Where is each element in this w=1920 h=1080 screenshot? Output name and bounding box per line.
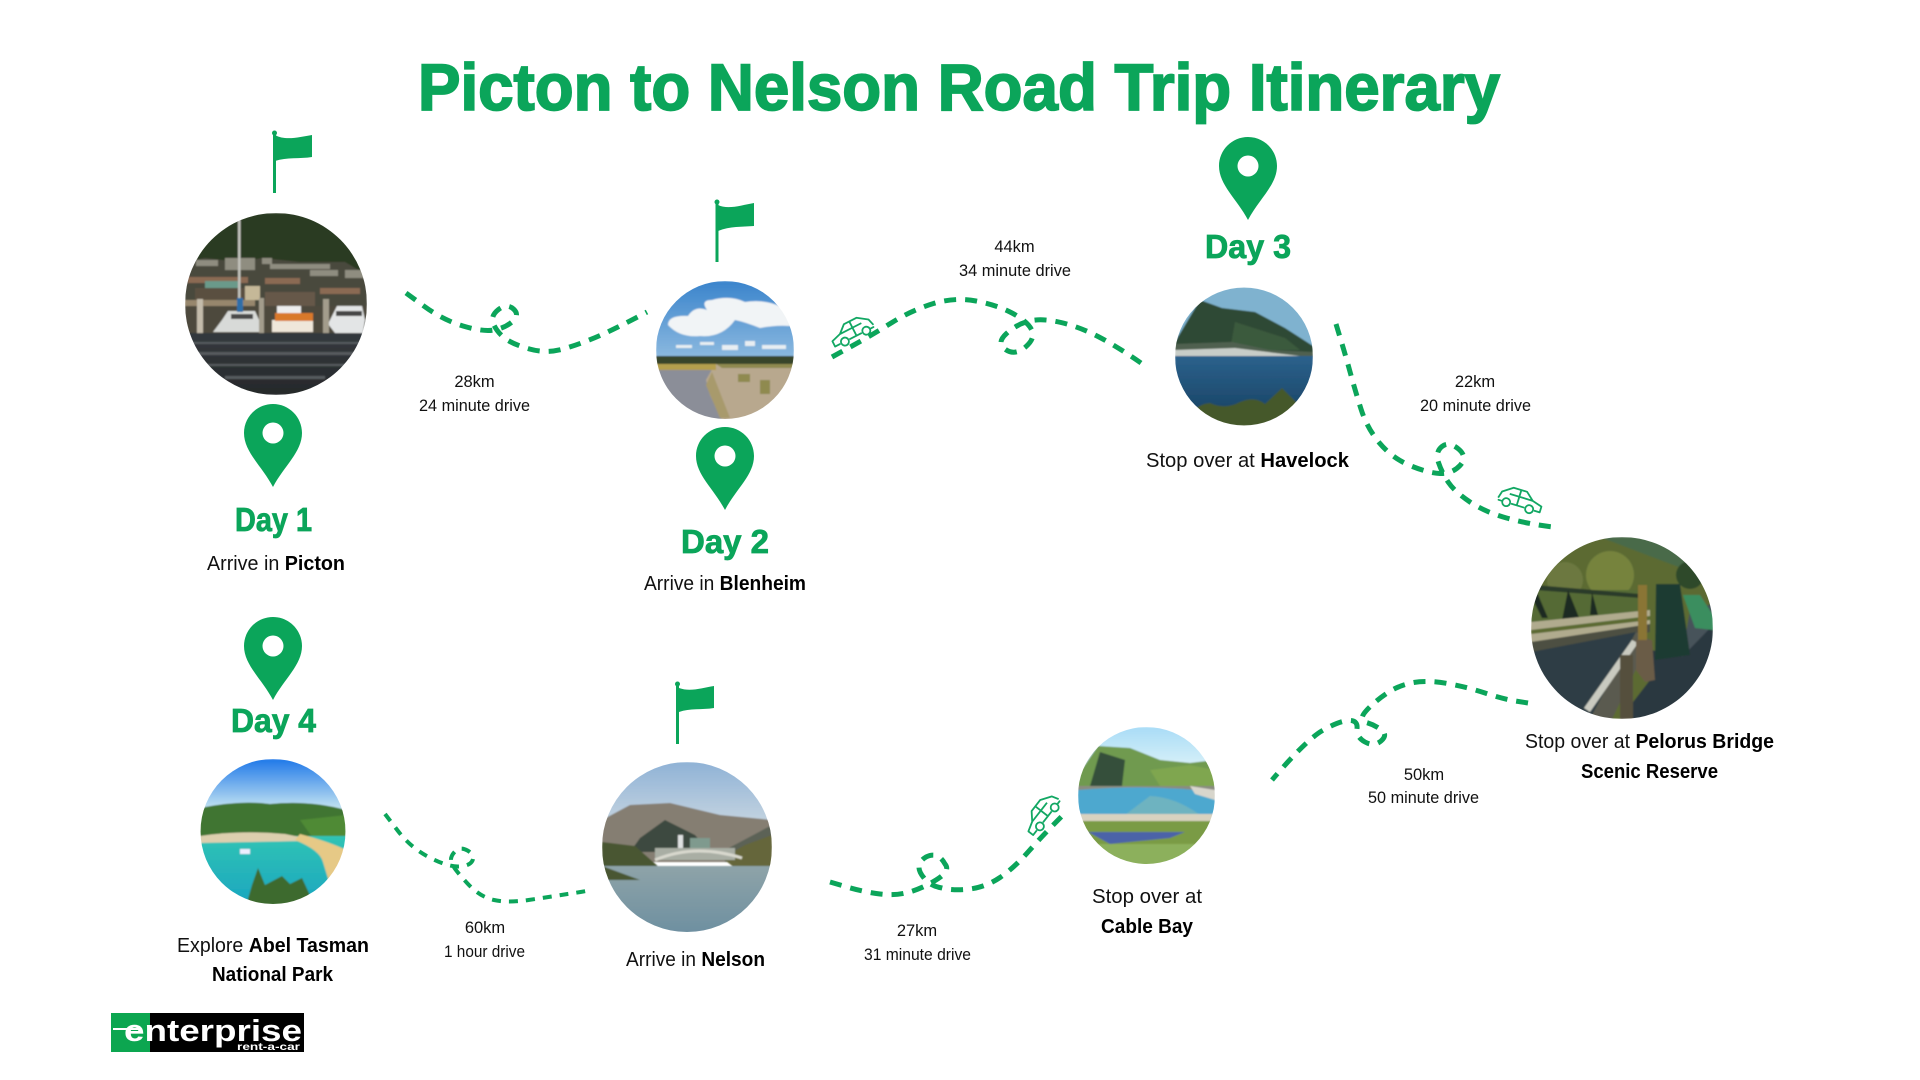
icon: flag Picton <box>272 130 312 193</box>
icon: pin Day 3 <box>1219 137 1277 220</box>
text: 28km: 28km <box>454 373 495 391</box>
text: 34 minute drive: 34 minute drive <box>959 262 1071 280</box>
icon: pin Day 2 <box>696 427 754 510</box>
text: 1 hour drive: 1 hour drive <box>444 943 525 961</box>
label: Arrive in Nelson: Arrive in Nelson <box>626 948 765 971</box>
panel: Cable Bay <box>1078 727 1215 938</box>
heading: Day 1: Day 1 <box>235 501 312 538</box>
route: Picton to Blenheim <box>406 293 647 415</box>
photo: Picton marina <box>185 213 367 395</box>
text: 60km: 60km <box>465 919 505 937</box>
text: 27km: 27km <box>897 922 937 940</box>
text: 50 minute drive: 50 minute drive <box>1368 789 1479 807</box>
photo: Pelorus Bridge <box>1530 537 1713 719</box>
label: Stop over at Havelock: Stop over at Havelock <box>1146 449 1350 472</box>
text: 24 minute drive: 24 minute drive <box>419 397 530 415</box>
text: 31 minute drive: 31 minute drive <box>864 946 971 964</box>
logo: enterprise rent-a-car: rent-a-car <box>237 1041 300 1053</box>
label: Stop over at Pelorus Bridge: Stop over at Pelorus Bridge <box>1525 730 1774 753</box>
photo: Blenheim river <box>656 281 794 420</box>
icon: flag Nelson <box>675 682 714 744</box>
heading: Day 4: Day 4 <box>231 702 317 739</box>
photo: Havelock bay <box>1175 287 1313 426</box>
label: Stop over at: Stop over at <box>1092 885 1202 908</box>
icon: car Blenheim route <box>828 312 876 350</box>
icon: car Cable Bay route <box>1021 791 1063 838</box>
photo: Nelson river <box>602 762 772 934</box>
photo: Abel Tasman beach <box>200 759 346 906</box>
panel: Pelorus Bridge <box>1525 537 1774 783</box>
icon: pin Day 4 <box>244 617 302 700</box>
text: 22km: 22km <box>1455 373 1495 391</box>
route: Havelock to Pelorus Bridge <box>1336 324 1553 527</box>
panel: Day 1 Picton <box>185 130 367 575</box>
icon: car Havelock route <box>1496 484 1544 516</box>
label: Cable Bay: Cable Bay <box>1101 915 1194 938</box>
icon: pin Day 1 <box>244 404 302 487</box>
route: Pelorus Bridge to Cable Bay <box>1272 681 1528 807</box>
title: Picton to Nelson Road Trip Itinerary <box>418 50 1500 124</box>
heading: Day 2: Day 2 <box>681 523 769 560</box>
heading: Day 3: Day 3 <box>1205 228 1291 265</box>
route: Blenheim to Havelock <box>828 238 1141 363</box>
text: 44km: 44km <box>994 238 1035 256</box>
route: Nelson to Abel Tasman <box>385 814 586 961</box>
label: Arrive in Blenheim: Arrive in Blenheim <box>644 572 806 595</box>
route: Cable Bay to Nelson <box>830 791 1066 964</box>
label: Arrive in Picton: Arrive in Picton <box>207 552 345 575</box>
panel: Nelson <box>602 682 772 971</box>
logo: enterprise rent-a-car <box>111 1013 304 1053</box>
icon: flag Blenheim <box>714 200 754 262</box>
label: National Park: National Park <box>212 963 334 986</box>
panel: Day 3 Havelock <box>1146 137 1350 472</box>
text: 20 minute drive: 20 minute drive <box>1420 397 1531 415</box>
text: 50km: 50km <box>1404 766 1444 784</box>
logo: enterprise rent-a-car: enterprise <box>124 1013 302 1048</box>
label: Explore Abel Tasman: Explore Abel Tasman <box>177 934 369 957</box>
label: Scenic Reserve: Scenic Reserve <box>1581 760 1718 783</box>
panel: Day 4 Abel Tasman <box>177 617 369 986</box>
photo: Cable Bay <box>1078 727 1215 866</box>
panel: Day 2 Blenheim <box>644 200 806 595</box>
